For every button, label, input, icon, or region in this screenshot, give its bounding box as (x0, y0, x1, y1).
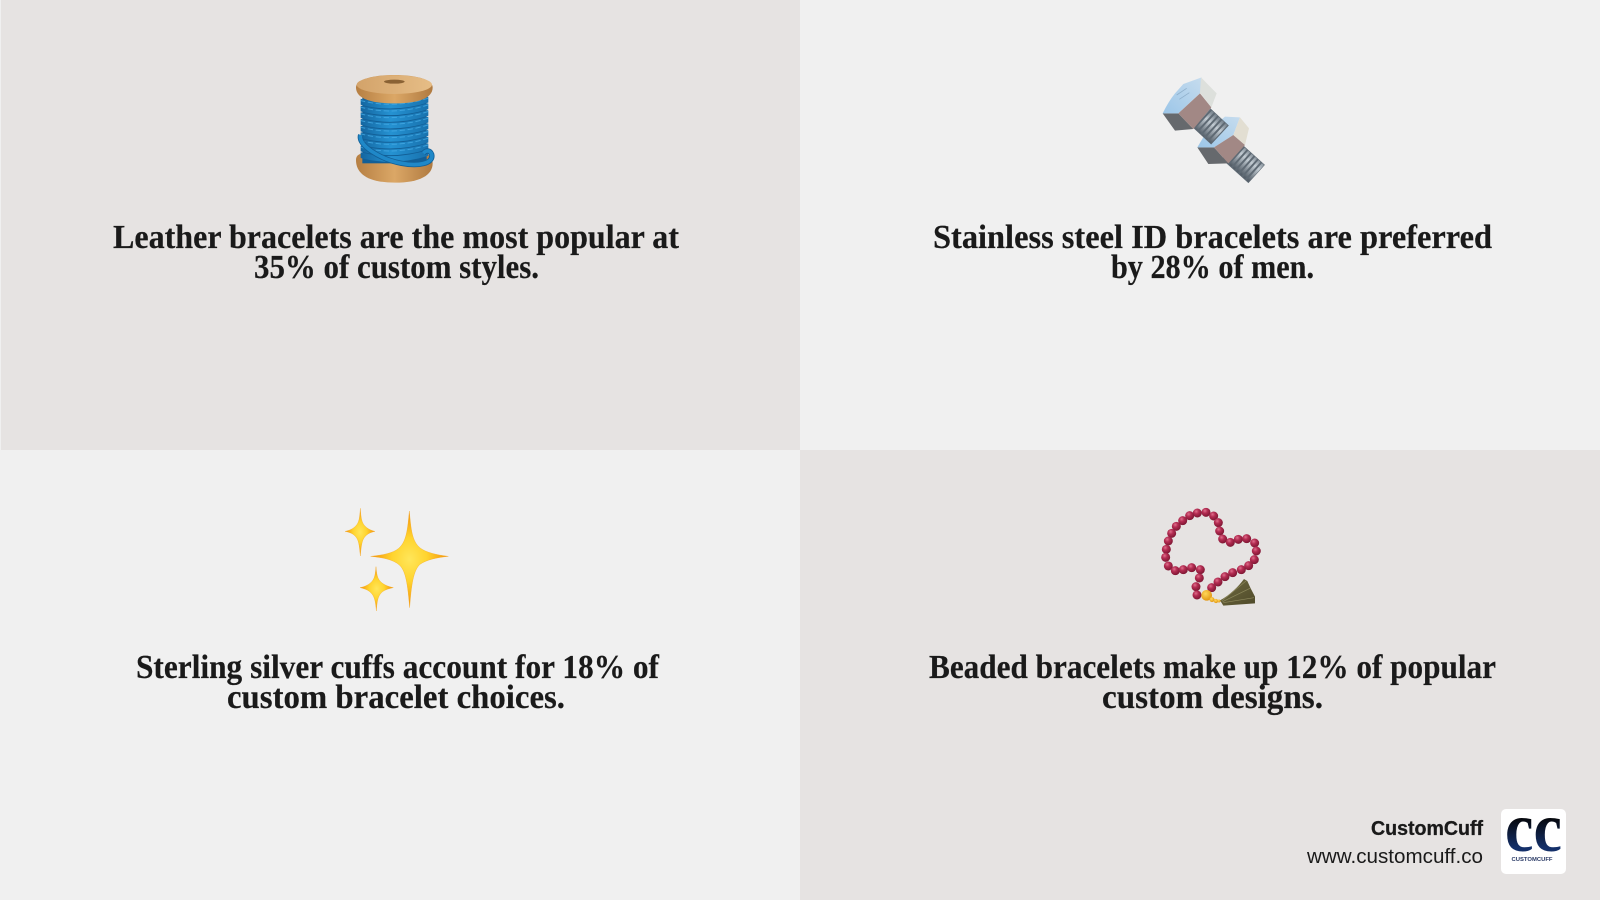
heading: sterling silver: custom bracelet choices. (227, 679, 565, 716)
panel: beaded bracelets (800, 450, 1600, 900)
heading: leather bracelets: 35% of custom styles. (254, 249, 539, 286)
heading: beaded bracelets: Beaded bracelets make up 12% of popular (929, 649, 1496, 686)
panel: leather bracelets (0, 0, 800, 450)
heading: beaded bracelets: custom designs. (1102, 679, 1323, 716)
logo: cc (1505, 790, 1562, 867)
heading: leather bracelets: Leather bracelets are the most popular at (113, 219, 680, 256)
brand block (1306, 790, 1566, 874)
heading: stainless steel: by 28% of men. (1111, 249, 1314, 286)
panel: stainless steel (800, 0, 1600, 450)
heading: sterling silver: Sterling silver cuffs account for 18% of (136, 649, 660, 686)
panel: sterling silver (0, 450, 800, 900)
icon: prayer beads with tassel (1161, 508, 1261, 606)
heading: stainless steel: Stainless steel ID bracelets are preferred (933, 219, 1492, 256)
brand url: www.customcuff.co (1306, 846, 1483, 868)
icon: sparkles (345, 508, 448, 611)
brand name: CustomCuff (1371, 818, 1483, 840)
icon: spool of thread (356, 75, 433, 183)
icon: bolt and nut (1163, 77, 1257, 174)
logo: CUSTOMCUFF (1512, 857, 1552, 863)
